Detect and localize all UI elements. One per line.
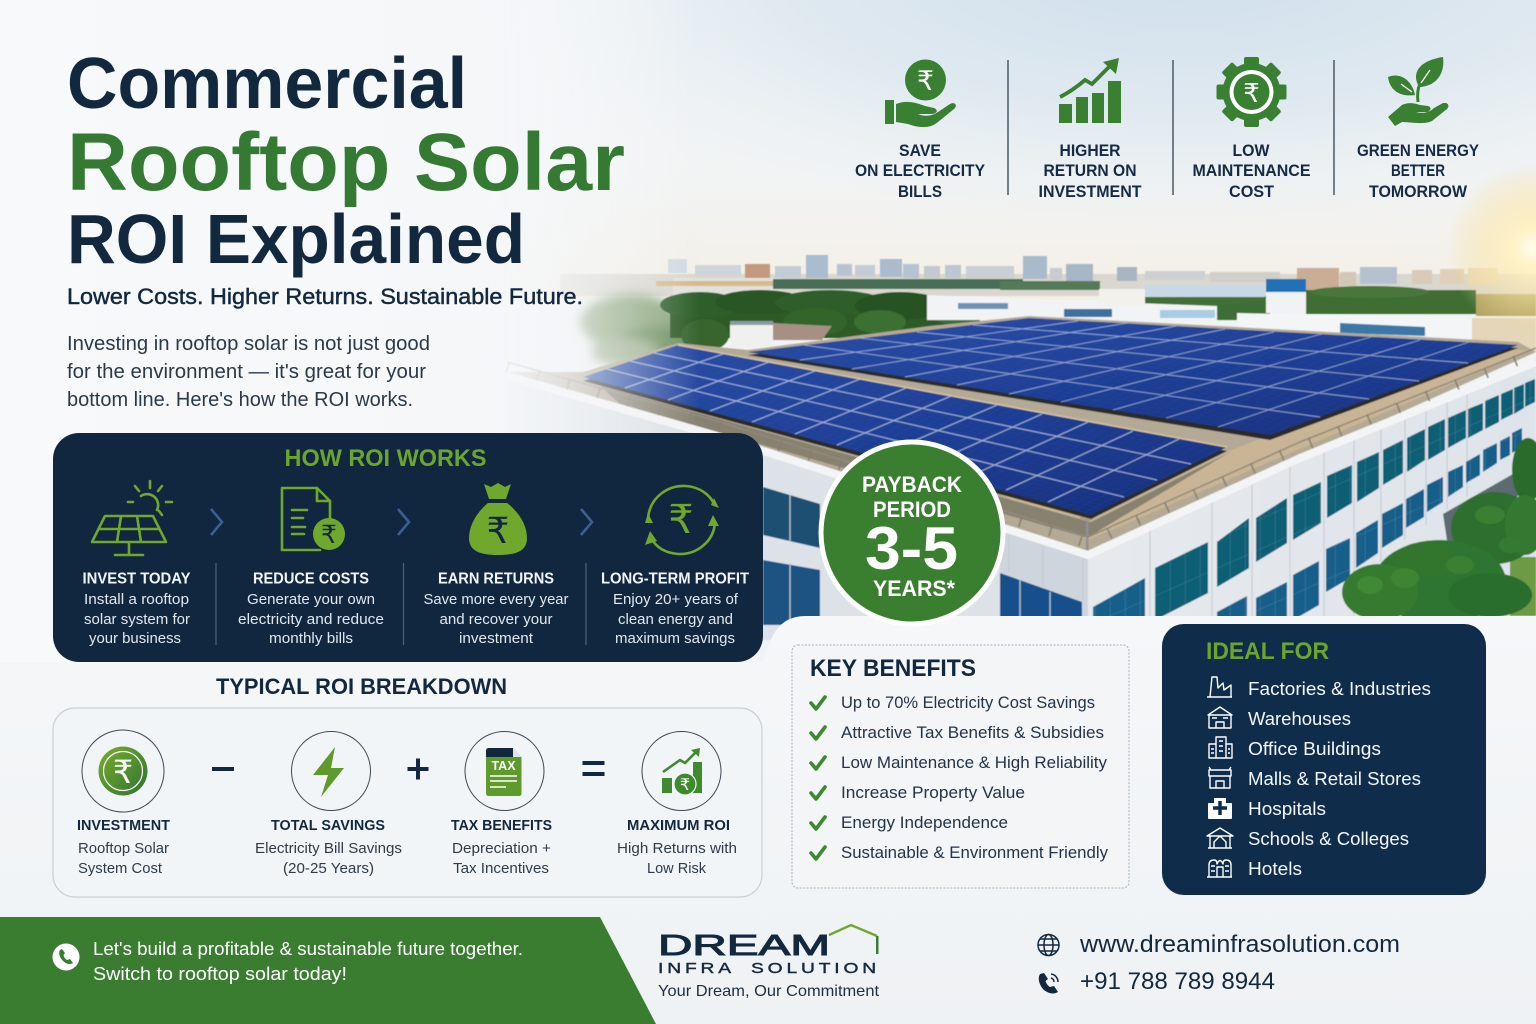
building walls <box>507 358 1536 640</box>
logo: Dream Infra Solution: SOLUTION <box>751 960 880 977</box>
step: earn returns: investment <box>459 630 534 647</box>
roof deck and parapet <box>507 316 1536 555</box>
item: tax benefits: TAX BENEFITS <box>451 818 552 834</box>
item: maximum ROI: Low Risk <box>647 860 706 877</box>
icon: factory <box>1207 677 1232 697</box>
background: rooftop photo scene <box>0 0 1536 662</box>
step: reduce costs: Generate your own <box>247 591 375 608</box>
item: tax benefits: Tax Incentives <box>453 860 549 877</box>
icon: hotel <box>1207 860 1232 877</box>
benefit list: Sustainable & Environment Friendly <box>841 844 1109 862</box>
icon: rupee coin <box>98 746 148 796</box>
step: reduce costs <box>238 488 384 647</box>
icon: ROI growth <box>662 748 702 795</box>
check icons <box>811 697 825 859</box>
step: invest today: solar system for <box>84 611 190 628</box>
item: maximum ROI: MAXIMUM ROI <box>627 818 730 834</box>
benefit: save on electricity bills: SAVE <box>899 142 941 160</box>
footer call to action: Switch to rooftop solar today! <box>93 963 347 984</box>
icon: phone handset <box>1039 973 1058 993</box>
step: reduce costs: electricity and reduce <box>238 611 384 628</box>
step: reduce costs: REDUCE COSTS <box>253 570 369 588</box>
audience list: Hospitals <box>1248 798 1326 819</box>
step: earn returns: EARN RETURNS <box>438 570 554 588</box>
audience list <box>1248 678 1431 879</box>
title <box>67 44 625 278</box>
website: www.dreaminfrasolution.com <box>1079 931 1400 958</box>
item: investment: System Cost <box>78 860 163 877</box>
icon: school <box>1207 828 1233 848</box>
item: total savings: (20-25 Years) <box>283 860 374 877</box>
benefit list: Increase Property Value <box>841 784 1025 802</box>
tree band <box>580 286 1536 370</box>
benefit: save on electricity bills <box>855 60 985 201</box>
skyline <box>560 255 1536 296</box>
benefit: green energy better tomorrow: TOMORROW <box>1369 183 1467 201</box>
heading: how ROI works: HOW ROI WORKS <box>284 445 486 472</box>
logo: Dream Infra Solution: INFRA <box>658 960 735 977</box>
step: long-term profit: maximum savings <box>615 630 735 647</box>
step: invest today: your business <box>89 630 181 647</box>
contact details <box>1038 931 1400 995</box>
footer call to action <box>0 917 656 1024</box>
icon: ROI growth: ₹ <box>680 777 690 794</box>
benefit: green energy better tomorrow: BETTER <box>1391 162 1445 180</box>
panel: ideal for <box>1162 624 1486 895</box>
audience list: Factories & Industries <box>1248 678 1431 699</box>
top benefits row <box>855 57 1479 201</box>
step: invest today: INVEST TODAY <box>82 570 191 588</box>
item: tax benefits: Depreciation + <box>452 840 551 857</box>
heading: typical ROI breakdown: TYPICAL ROI BREAKDOWN <box>216 674 507 699</box>
benefit: low maintenance cost: LOW <box>1232 142 1270 160</box>
step: long-term profit: Enjoy 20+ years of <box>613 591 739 608</box>
benefit: higher return on investment: INVESTMENT <box>1038 183 1142 201</box>
step: reduce costs: monthly bills <box>269 630 353 647</box>
heading: key benefits: KEY BENEFITS <box>810 655 976 682</box>
intro paragraph: for the environment — it's great for your <box>67 361 426 383</box>
title: Rooftop Solar <box>67 117 625 208</box>
icon: tax document: TAX <box>491 759 516 773</box>
benefit: higher return on investment: RETURN ON <box>1044 162 1136 180</box>
logo: Dream Infra Solution: Your Dream, Our Commitment <box>658 983 880 1000</box>
payback period badge: PERIOD <box>873 497 951 522</box>
solar array front <box>583 345 1227 519</box>
mid-ground buildings <box>730 279 1472 347</box>
intro paragraph: Investing in rooftop solar is not just good <box>67 333 430 355</box>
payback period badge: 3-5 <box>865 515 958 582</box>
audience list: Schools & Colleges <box>1248 828 1409 849</box>
audience list: Malls & Retail Stores <box>1248 768 1421 789</box>
benefit list: Attractive Tax Benefits & Subsidies <box>841 724 1104 742</box>
payback period badge: YEARS* <box>873 576 955 601</box>
audience list: Warehouses <box>1248 708 1351 729</box>
item: total savings <box>255 818 402 877</box>
step: earn returns: ₹ <box>487 510 509 551</box>
intro paragraph: bottom line. Here's how the ROI works. <box>67 389 413 411</box>
benefit list: Energy Independence <box>841 814 1008 832</box>
icon: hospital <box>1208 798 1232 819</box>
payback period badge: PAYBACK <box>862 472 962 497</box>
step: long-term profit: clean energy and <box>618 611 733 628</box>
sun glow <box>1447 163 1536 333</box>
heading: ideal for: IDEAL FOR <box>1206 638 1329 665</box>
icon: office building <box>1209 737 1232 758</box>
panel: key benefits <box>792 645 1129 888</box>
item: maximum ROI <box>617 818 737 877</box>
item: total savings: Electricity Bill Savings <box>255 840 402 857</box>
item: total savings: TOTAL SAVINGS <box>271 818 385 834</box>
panel: ROI breakdown <box>53 708 762 897</box>
step: earn returns: and recover your <box>440 611 553 628</box>
step: invest today: Install a rooftop <box>84 591 189 608</box>
trees lower right <box>1342 438 1536 624</box>
footer call to action: Let's build a profitable & sustainable future together. <box>93 938 523 959</box>
icon: warehouse <box>1208 707 1232 728</box>
operators <box>212 758 604 780</box>
step: long-term profit: LONG-TERM PROFIT <box>601 570 749 588</box>
benefit: higher return on investment: HIGHER <box>1060 142 1121 160</box>
step: reduce costs: ₹ <box>321 521 337 549</box>
benefit list: Low Maintenance & High Reliability <box>841 754 1108 772</box>
item: maximum ROI: High Returns with <box>617 840 737 857</box>
benefit list <box>841 694 1109 862</box>
icon: mall <box>1209 767 1231 788</box>
benefit: save on electricity bills: BILLS <box>898 183 942 201</box>
icon: globe <box>1038 934 1059 956</box>
benefit: save on electricity bills: ₹ <box>917 66 934 96</box>
logo: Dream Infra Solution <box>658 925 880 1000</box>
arrows between steps <box>211 509 592 535</box>
lower page background <box>0 616 1536 1024</box>
benefit: save on electricity bills: ON ELECTRICITY <box>855 162 985 180</box>
item: investment: INVESTMENT <box>77 818 170 834</box>
step: earn returns: Save more every year <box>424 591 568 608</box>
step: earn returns <box>424 483 568 647</box>
item: tax benefits <box>451 818 552 877</box>
payback period badge <box>821 442 1003 624</box>
panel: how ROI works <box>53 433 763 662</box>
icon: tax document <box>486 748 522 796</box>
benefit: low maintenance cost: MAINTENANCE <box>1192 162 1310 180</box>
icon: rupee coin: ₹ <box>113 754 133 790</box>
benefit: low maintenance cost: COST <box>1229 183 1274 201</box>
benefit: green energy better tomorrow <box>1357 57 1479 201</box>
phone number: +91 788 789 8944 <box>1080 968 1275 995</box>
audience list: Hotels <box>1248 858 1302 879</box>
step: invest today <box>82 481 191 647</box>
intro paragraph <box>67 333 430 411</box>
title: ROI Explained <box>67 200 525 278</box>
benefit list: Up to 70% Electricity Cost Savings <box>841 694 1095 712</box>
step: long-term profit: ₹ <box>668 498 694 542</box>
audience list: Office Buildings <box>1248 738 1381 759</box>
benefit: higher return on investment <box>1038 58 1142 201</box>
item: investment <box>77 818 170 877</box>
item: investment: Rooftop Solar <box>78 840 169 857</box>
benefit: low maintenance cost: ₹ <box>1243 78 1260 108</box>
logo: Dream Infra Solution: DREAM <box>658 930 830 962</box>
step: long-term profit <box>601 486 749 647</box>
icon: lightning bolt <box>313 747 344 797</box>
subtitle: Lower Costs. Higher Returns. Sustainable Future. <box>67 284 583 309</box>
benefit: green energy better tomorrow: GREEN ENERGY <box>1357 142 1479 160</box>
solar array back <box>748 318 1518 440</box>
title: Commercial <box>67 44 467 124</box>
icon: phone <box>52 944 80 970</box>
benefit: low maintenance cost <box>1192 57 1310 201</box>
